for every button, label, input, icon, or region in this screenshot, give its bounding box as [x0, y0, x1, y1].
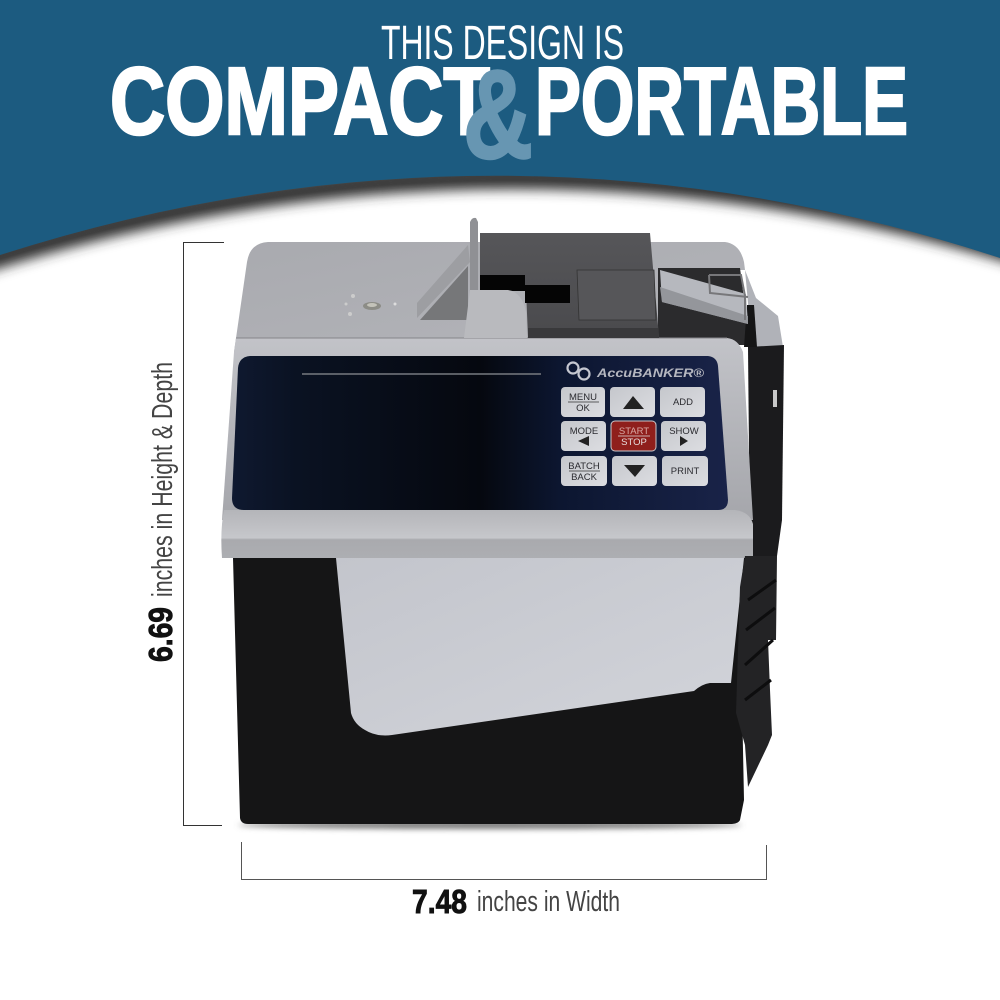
key: up — [610, 387, 655, 417]
key: add: ADD — [673, 397, 693, 408]
key: menu ok: MENU — [569, 392, 597, 403]
key: add — [660, 387, 705, 417]
key: batch back — [561, 456, 607, 486]
height label — [142, 362, 179, 662]
height dimension bracket — [184, 242, 224, 826]
key: mode — [561, 421, 606, 451]
button mounting screw — [344, 294, 396, 316]
key: print — [662, 456, 708, 486]
key: start stop: STOP — [621, 437, 647, 448]
ampersand: & — [463, 44, 533, 185]
key: start stop: START — [619, 426, 649, 437]
width label — [412, 883, 620, 920]
key: show — [661, 421, 706, 451]
width label: inches in Width — [477, 886, 620, 918]
key: batch back: BATCH — [568, 461, 600, 472]
feed guide plate — [417, 218, 478, 338]
ribbed rear tray — [736, 556, 777, 787]
title — [110, 17, 908, 185]
display window line — [302, 373, 541, 375]
silver side panel — [336, 558, 744, 735]
money counter machine — [221, 218, 784, 829]
height label: inches in Height & Depth — [147, 362, 179, 597]
key: menu ok — [561, 387, 605, 417]
strap and wire clip — [660, 270, 748, 324]
keypad — [561, 387, 708, 486]
title word: compact: COMPACT — [110, 48, 490, 155]
key: start stop — [611, 421, 656, 451]
key: down — [612, 456, 657, 486]
hopper cover — [464, 233, 659, 338]
bezel — [222, 338, 753, 520]
silver front lip — [221, 510, 753, 558]
key: print: PRINT — [671, 466, 699, 477]
height label: 6.69 — [142, 607, 179, 662]
key: batch back: BACK — [571, 472, 598, 483]
key: menu ok: OK — [576, 403, 591, 414]
width dimension bracket — [242, 842, 766, 880]
title line: this design is: THIS DESIGN IS — [381, 17, 624, 70]
floor shadow — [238, 821, 742, 829]
key: mode: MODE — [570, 426, 598, 437]
header banner — [0, 0, 1000, 266]
top plate — [234, 242, 745, 352]
black lower body — [233, 558, 746, 824]
right side rear mechanism — [658, 268, 784, 556]
logo: AccuBANKER® — [596, 368, 705, 380]
logo — [568, 362, 705, 380]
width label: 7.48 — [412, 883, 467, 920]
key: show: SHOW — [669, 426, 699, 437]
control panel — [232, 356, 728, 510]
